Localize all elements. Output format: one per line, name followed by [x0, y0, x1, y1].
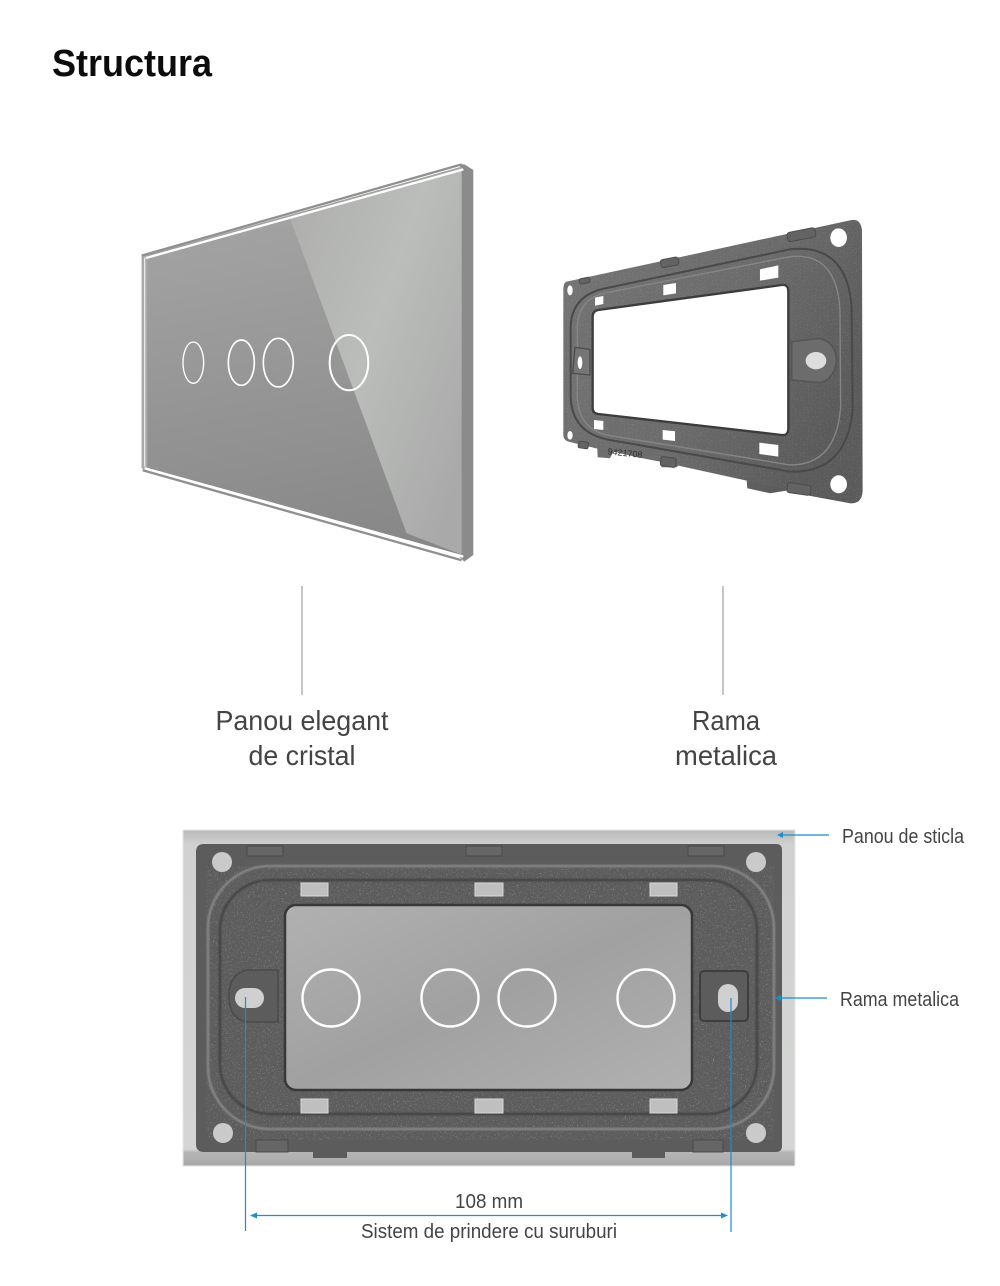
frame boss left [573, 347, 590, 375]
back frame speckle texture [206, 866, 774, 1140]
caption frame [675, 705, 777, 771]
back frame slots [301, 883, 677, 1113]
caption panel: Panou elegant [216, 705, 389, 736]
callout glass panel: Panou de sticla [842, 826, 965, 848]
frame boss right [792, 338, 837, 383]
back screw slots [235, 984, 738, 1012]
back frame notches [247, 846, 724, 1152]
frame mounting holes [567, 228, 847, 493]
back screw boss left [229, 970, 278, 1022]
panel top bevel [142, 164, 463, 258]
title: Structura [52, 43, 213, 85]
caption frame: Rama [692, 705, 760, 736]
leader line frame [722, 586, 724, 695]
panel side edge [460, 164, 473, 562]
back frame corner holes [212, 852, 766, 1143]
touch button rings [183, 335, 368, 390]
caption frame: metalica [675, 740, 777, 771]
back view assembly [183, 830, 795, 1166]
frame raised track [571, 249, 853, 472]
dimension 108 mm: 108 mm [455, 1191, 523, 1213]
back button rings [302, 970, 674, 1026]
panel light reflection [290, 171, 462, 555]
glass panel front view [142, 164, 473, 562]
callout glass panel [777, 826, 965, 848]
dimension 108 mm [246, 997, 731, 1243]
frame body [563, 220, 863, 503]
metal frame perspective view [563, 220, 863, 503]
caption panel [216, 705, 389, 771]
frame opening [593, 285, 788, 435]
panel glass face [142, 167, 462, 557]
frame serial number: 9421708 [607, 446, 643, 460]
frame slots [594, 265, 778, 457]
back frame raised track [208, 866, 774, 1129]
caption panel: de cristal [248, 740, 356, 771]
panel bottom bevel [143, 257, 463, 560]
frame speckle texture [563, 220, 863, 503]
back window [285, 905, 692, 1090]
back screw boss right [700, 971, 748, 1021]
dimension 108 mm: Sistem de prindere cu suruburi [361, 1221, 617, 1243]
leader line panel [301, 586, 303, 695]
callout metal frame: Rama metalica [840, 989, 960, 1011]
back glass panel [183, 830, 795, 1166]
panel left edge [142, 255, 147, 472]
callout metal frame [775, 989, 960, 1011]
frame tabs [578, 227, 816, 496]
back metal frame [196, 844, 782, 1158]
